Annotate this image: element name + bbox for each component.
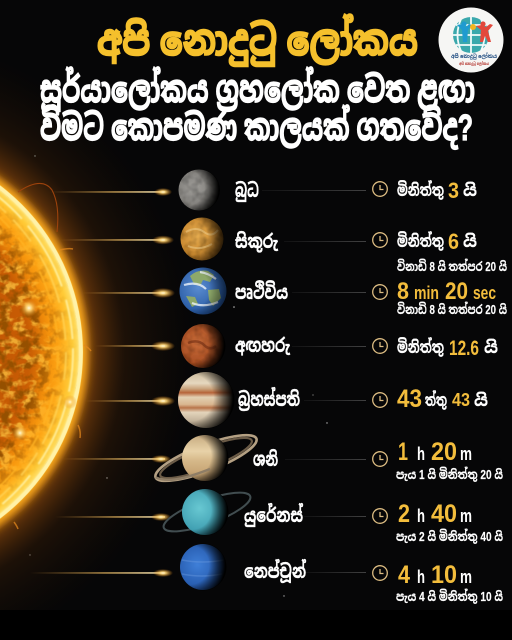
planet: Neptune: [180, 544, 226, 590]
title: අපි නොදුටු ලෝකය: [97, 13, 418, 66]
time: Mars: යි: [484, 339, 498, 357]
planet: Uranus with ring: [160, 485, 254, 539]
label: Saturn: ශනි: [253, 449, 278, 471]
time: Venus: මිනිත්තු: [397, 231, 444, 251]
label: Mercury: බුධ: [235, 180, 259, 202]
planet: Mercury: [178, 169, 220, 211]
time: Earth: 20: [445, 278, 468, 305]
label: Jupiter: බ්‍රහස්පති: [238, 386, 300, 411]
planet: Jupiter: [178, 372, 234, 428]
time: Uranus: 40: [431, 500, 457, 528]
time: Mars: [397, 337, 498, 360]
label: Venus: සිකුරු: [235, 231, 278, 253]
time: Saturn: h: [417, 444, 425, 464]
time: Jupiter: 43: [397, 385, 422, 413]
time: Neptune: [396, 561, 503, 605]
time: Venus: යි: [463, 233, 477, 251]
time: Neptune: 4: [398, 561, 410, 589]
time: Saturn: m: [460, 444, 472, 464]
time: Venus: 6: [448, 229, 459, 254]
time: Uranus: h: [417, 506, 425, 526]
logo badge: අපි නොදුටු ලෝකය: [451, 52, 497, 60]
time: Neptune: h: [417, 567, 425, 587]
time: Mars: මිනිත්තු: [397, 337, 444, 357]
time: Saturn: 1: [398, 438, 408, 466]
time: Mercury: මිනිත්තු: [397, 180, 444, 200]
time: Neptune: 10: [431, 561, 457, 589]
time: Mars: 12.6: [449, 337, 479, 360]
time: Earth: [397, 258, 507, 317]
time: Jupiter: ත්තු: [425, 390, 447, 410]
time: Saturn: [396, 438, 503, 483]
logo badge: [438, 8, 504, 72]
clock icons: [373, 182, 387, 580]
label: Uranus: යුරේනස්: [244, 502, 303, 527]
time: Uranus: [396, 500, 503, 545]
planet: Earth: [179, 267, 227, 315]
logo badge: අපි නොදුටු ලෝකය: [459, 61, 489, 67]
time: Earth: 8: [397, 278, 409, 305]
label: Neptune: නෙප්චූන්: [244, 558, 306, 583]
time: Venus: [397, 229, 477, 254]
time: Jupiter: යි: [474, 392, 488, 410]
connector lines: [262, 190, 366, 573]
time: Neptune: m: [460, 567, 472, 587]
time: Mercury: යි: [463, 182, 477, 200]
label: Earth: පෘථිවිය: [235, 280, 288, 304]
time: Uranus: m: [460, 506, 472, 526]
time: Earth: sec: [473, 283, 496, 303]
planet: Mars: [180, 324, 226, 368]
time: Mercury: 3: [448, 178, 459, 203]
label: Mars: අඟහරු: [235, 336, 290, 357]
sun rays to planets: [30, 188, 175, 577]
time: Mercury: [397, 178, 477, 203]
planet: Venus: [180, 217, 224, 261]
time: Uranus: 2: [398, 500, 410, 528]
time: Earth: min: [414, 283, 439, 303]
time: Saturn: 20: [431, 438, 457, 466]
sun: [0, 96, 160, 608]
planet: Saturn with rings: [151, 427, 261, 489]
time: Jupiter: 43: [452, 390, 470, 410]
time: Jupiter: [397, 385, 488, 413]
